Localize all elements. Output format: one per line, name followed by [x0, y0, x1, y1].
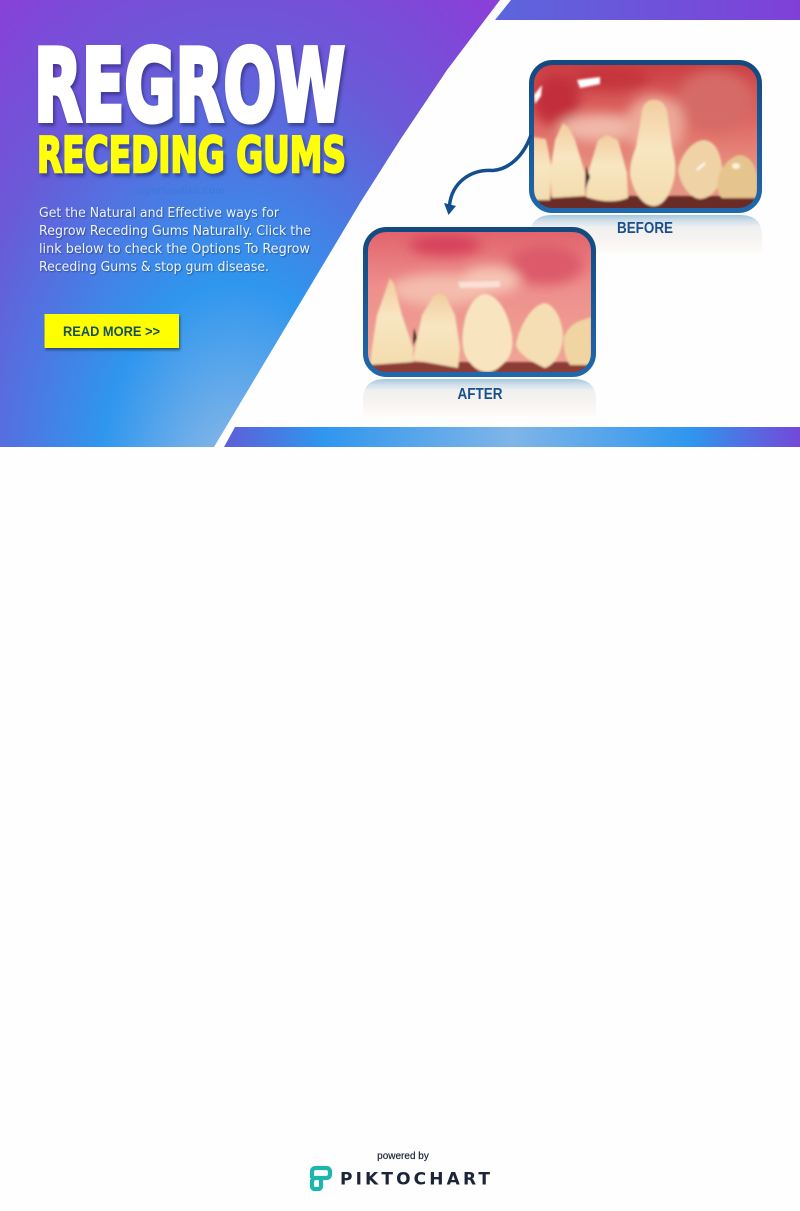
powered by label: powered by	[377, 1151, 429, 1162]
piktochart logo	[312, 1168, 490, 1190]
bottom gradient strip	[224, 427, 800, 447]
after reflection	[363, 379, 596, 420]
photo: after	[363, 227, 596, 377]
arrow: before to after	[444, 135, 531, 215]
label: after: AFTER	[458, 386, 503, 403]
intro text block: link below to check the Options To Regrow	[39, 242, 310, 257]
intro text block: Regrow Receding Gums Naturally. Click the	[39, 224, 311, 239]
intro text block: Get the Natural and Effective ways for	[39, 206, 280, 221]
subtitle: RECEDING GUMS: RECEDING GUMS	[37, 127, 346, 184]
left gradient panel	[0, 0, 500, 447]
icon: piktochart mark	[312, 1168, 330, 1189]
watermark: Superfoodish.com	[132, 185, 225, 197]
intro text block: Receding Gums & stop gum disease.	[39, 260, 269, 275]
top gradient strip	[495, 0, 800, 20]
button: read more: READ MORE >>	[63, 323, 160, 339]
photo: before	[530, 60, 762, 213]
wordmark: PIKTOCHART	[340, 1170, 490, 1190]
before reflection	[530, 215, 762, 258]
intro text block	[39, 206, 311, 275]
button: read more	[44, 314, 179, 348]
title: REGROW: REGROW	[34, 28, 345, 144]
label: before: BEFORE	[617, 220, 673, 237]
